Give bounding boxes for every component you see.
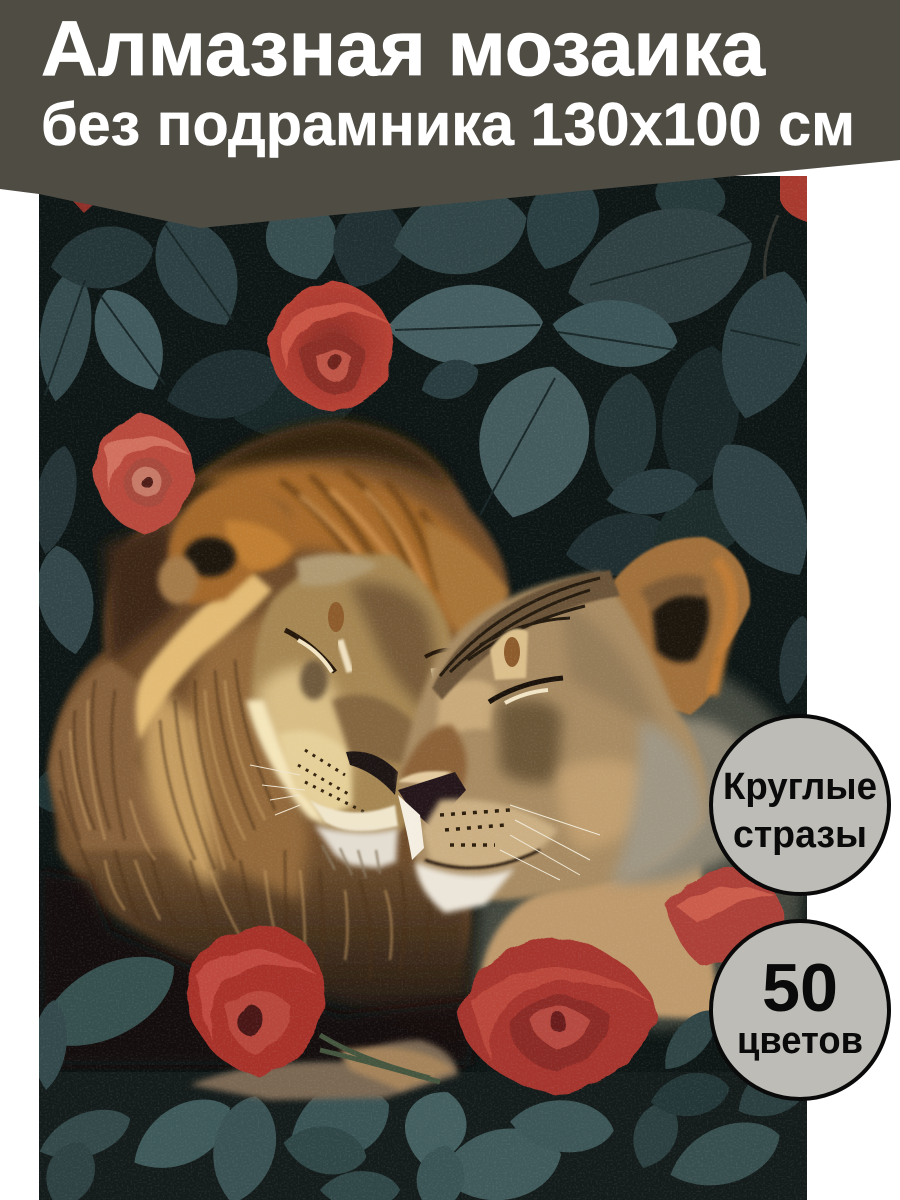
badge: 50 colours — [711, 921, 889, 1099]
whiskers — [250, 765, 305, 815]
badge: round rhinestones: стразы — [733, 814, 867, 856]
inner mane — [170, 610, 310, 900]
nose — [346, 751, 398, 795]
male lion — [40, 420, 509, 1065]
ground and lower leaves — [20, 935, 823, 1200]
bright strand — [142, 680, 215, 890]
forehead stripes — [432, 570, 620, 700]
closed eyes — [285, 630, 335, 672]
nose bridge — [400, 725, 467, 788]
foliage: upper leaves — [24, 162, 834, 822]
mane base — [48, 422, 509, 1000]
dark top rim — [170, 420, 455, 520]
dark behind-ear mane — [105, 520, 175, 665]
title banner — [0, 0, 900, 228]
title line 2: без подрамника 130х100 см — [41, 91, 855, 158]
muzzle — [422, 799, 558, 870]
painting: lions and roses — [20, 162, 834, 1200]
outer mane — [50, 660, 175, 850]
rose: right — [665, 868, 785, 965]
upper orange mane — [200, 464, 492, 640]
brow and bridge shading — [350, 583, 435, 710]
head — [398, 572, 707, 901]
muzzle spots — [298, 750, 370, 815]
paw and stems — [190, 1035, 458, 1100]
badge: 50 colours: 50 — [762, 950, 838, 1026]
face — [252, 554, 456, 837]
title line 1: Алмазная мозаика — [41, 4, 766, 92]
rose: top left fragment — [73, 201, 92, 213]
fur streaks — [60, 660, 430, 990]
closed eye — [489, 678, 563, 702]
rose: bottom centre — [458, 936, 658, 1095]
inner ear front — [490, 629, 528, 680]
rose: bottom left — [185, 925, 325, 1078]
ear — [600, 537, 750, 715]
badge: round rhinestones — [711, 716, 889, 894]
badge: 50 colours: цветов — [737, 1020, 863, 1062]
chin ruff — [314, 825, 398, 868]
lioness — [398, 537, 750, 913]
lioness body — [470, 640, 807, 1030]
rose: top right corner — [780, 176, 807, 222]
grain overlay — [39, 176, 807, 1200]
rose: top centre — [268, 280, 395, 413]
ear — [169, 482, 298, 605]
rose: left — [93, 415, 195, 535]
lower mane fading to dark — [54, 838, 479, 1012]
badge: round rhinestones: Круглые — [723, 766, 877, 808]
